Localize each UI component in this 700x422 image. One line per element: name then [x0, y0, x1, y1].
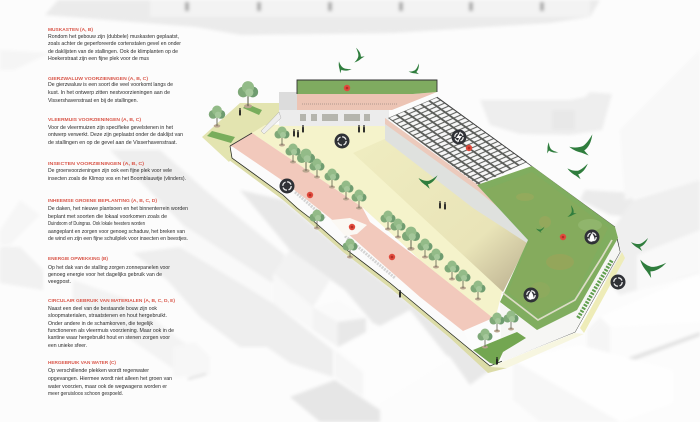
text block: water: Op verschillende plekken wordt regenwater [48, 368, 149, 374]
text block: water [48, 360, 172, 397]
text block: energie: genoeg energie voor het dagelijks gebruik van de [48, 272, 162, 278]
text block: gierzwaluw [48, 76, 173, 104]
text block: vleermuis: VLEERMUIS VOORZIENINGEN (A, B, C) [48, 117, 141, 123]
text block: gierzwaluw: Vissershavenstraat en bij de stallingen. [48, 98, 138, 104]
text block: circulair: een unieke sfeer. [48, 343, 87, 349]
text block: circulair: CIRCULAIR GEBRUIK VAN MATERIALEN (A, B, C, D, E) [48, 298, 175, 304]
text block: insecten: INSECTEN VOORZIENINGEN (A, B, C) [48, 161, 144, 167]
text block: circulair: kantine waar hergebruikt hout en stenen zorgen voor [48, 335, 170, 341]
back building facade [279, 80, 437, 126]
text block: water: HERGEBRUIK VAN WATER (C) [48, 360, 116, 366]
text block: vleermuis: de stallingen en op de gevel aan de Visserhavenstraat. [48, 140, 177, 146]
text block: beplanting: aangeplant en zorgen voor genoeg schaduw, het breken van [48, 229, 185, 235]
row houses [273, 250, 330, 307]
text block: muskasten: Hoekerstraat zijn een fijne plek voor de mus [48, 56, 149, 62]
text block: gierzwaluw: GIERZWALUW VOORZIENINGEN (A, B, C) [48, 76, 148, 82]
text block: water: opgevangen. Hiermee wordt niet alleen het groen van [48, 376, 172, 382]
text block: beplanting: beplant met soorten die lokaal voorkomen zoals de [48, 214, 167, 220]
text block: gierzwaluw: kust. In het ontwerp zitten nestvoorzieningen aan de [48, 90, 170, 96]
text block: beplanting: Duindoorn of Duingras. Ook lokale heesters worden [48, 221, 145, 227]
text block: beplanting [48, 198, 188, 242]
left lawn planters [207, 131, 235, 143]
left wing roof [230, 133, 620, 366]
text block: vleermuis [48, 117, 183, 146]
text block: circulair: sloopmaterialen, straatstenen en hout hergebruikt. [48, 313, 167, 319]
solar roof [388, 97, 615, 227]
text block: energie: veegpost. [48, 279, 71, 285]
text block: water: meer geruisloos schoon gespoeld. [48, 391, 123, 397]
text block: energie: Op het dak van de stalling zorgen zonnepanelen voor [48, 265, 170, 271]
text block: insecten: De groenvoorzieningen zijn ook een fijne plek voor vele [48, 168, 172, 174]
right wing facade [385, 118, 532, 243]
green roof [473, 166, 620, 365]
text block: insecten [48, 161, 186, 182]
text block: gierzwaluw: De gierzwaluw is een soort die veel voorkomt langs de [48, 82, 173, 88]
trees [209, 81, 518, 349]
people [239, 108, 498, 364]
garden wall [261, 112, 281, 134]
building site illustration [202, 80, 625, 373]
text block: muskasten: MUSKASTEN (A, B) [48, 27, 93, 33]
text block: energie: ENERGIE OPWEKKING (B) [48, 256, 108, 262]
street edge strip [229, 158, 507, 373]
text block: circulair: Naast een deel van de bestaande bouw zijn ook [48, 306, 157, 312]
courtyard [252, 122, 528, 320]
courtyard shadow [353, 138, 530, 292]
text block: vleermuis: Voor de vleermuizen zijn specifieke gevelstenen in het [48, 125, 174, 131]
text block: insecten: insecten zoals de Klimop vos en het Boomblauwtje (vlinders). [48, 176, 186, 182]
text block: beplanting: de wind en zijn een fijne schuilplek voor insecten en beestjes. [48, 236, 188, 242]
birds and bats [334, 48, 666, 281]
text block: vleermuis: ontwerp verwerkt. Deze zijn geplaatst onder de daklijst van [48, 132, 183, 138]
text block: beplanting: INHEEMSE GROENE BEPLANTING (A, B, C, D) [48, 198, 157, 204]
street [240, 190, 490, 385]
north-east blocks [480, 92, 612, 135]
text panel [48, 27, 188, 397]
icon markers [280, 130, 626, 302]
south-east white blocks [600, 273, 700, 327]
text block: circulair: Onder andere in de schamkorven, die tegelijk [48, 321, 153, 327]
text block: muskasten: zoals achter de geperforeerde cortenstalen gevel en onder [48, 41, 181, 47]
text block: muskasten: de daklijsten van de stallingen. Ook de klimplanten op de [48, 49, 178, 55]
text block: muskasten: Rondom het gebouw zijn (dubbele) muskasten geplaatst, [48, 34, 179, 40]
text block: muskasten [48, 27, 181, 62]
text block: circulair [48, 298, 175, 349]
text block: beplanting: De daken, het nieuwe plantsoen en het binnenterrein worden [48, 206, 188, 212]
red markers [307, 85, 566, 260]
shadow south of first row [133, 247, 333, 377]
left lawn [202, 103, 279, 162]
text block: water: water voorzien, maar ook de wegwagens worden er [48, 384, 167, 390]
text block: energie [48, 256, 170, 285]
text block: circulair: functioneren als vleermuis voorziening. Maar ook in de [48, 328, 174, 334]
